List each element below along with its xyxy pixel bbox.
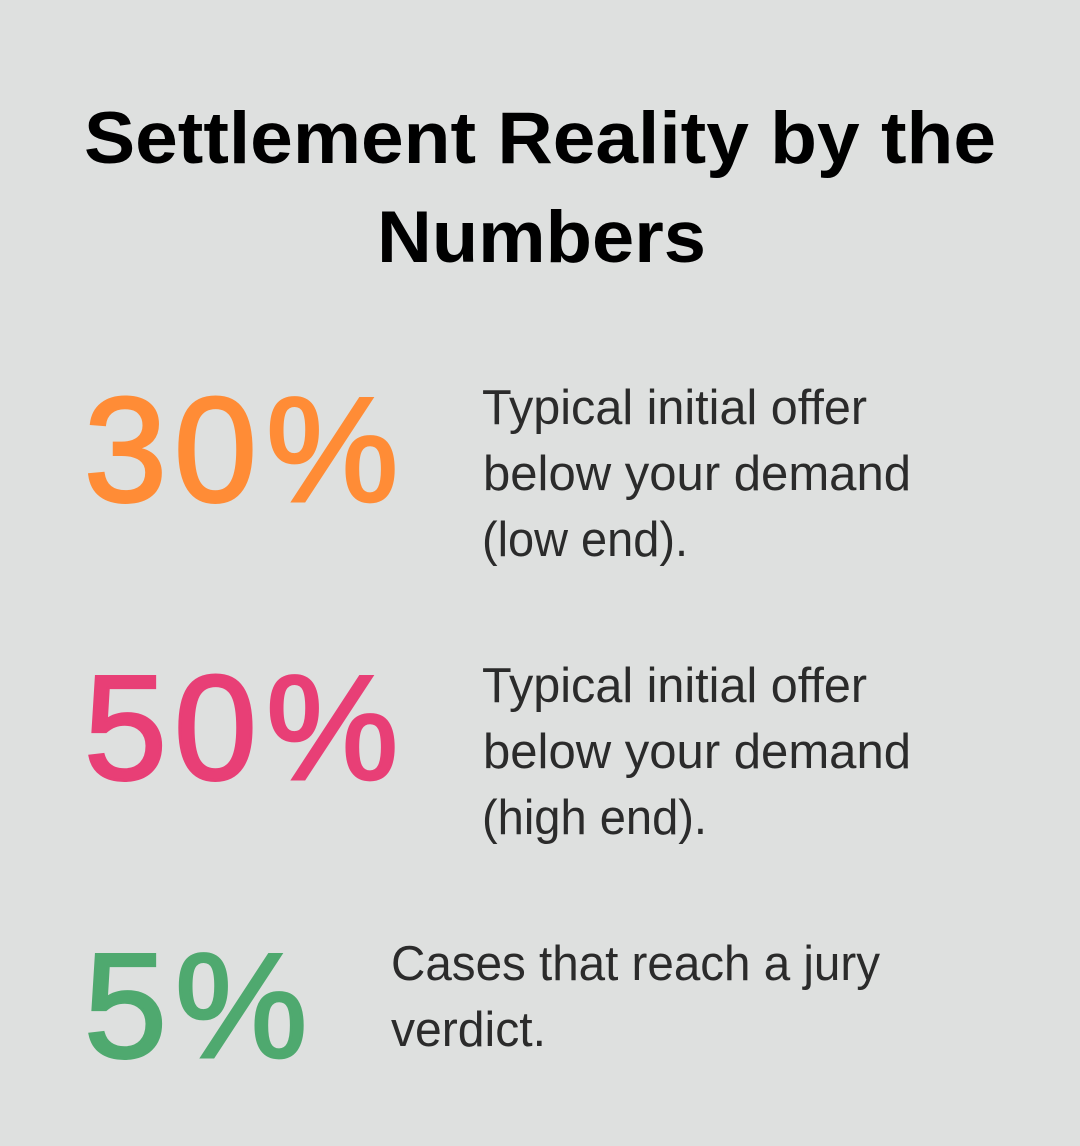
description: 30%: below your demand: [483, 447, 911, 501]
description: 5%: verdict.: [391, 1003, 546, 1057]
stat: 5%: [84, 922, 880, 1089]
title: Settlement Reality by the: [84, 98, 996, 179]
description: 30%: (low end).: [482, 513, 688, 567]
description: 50%: below your demand: [483, 725, 911, 779]
description: 30%: Typical initial offer: [482, 381, 867, 435]
description: 50%: [482, 659, 911, 845]
number: 5%: 5%: [84, 922, 308, 1089]
description: 30%: [482, 381, 911, 567]
number: 30%: 30%: [84, 366, 398, 533]
stat: 50%: [84, 644, 911, 845]
title: Numbers: [377, 197, 706, 278]
description: 50%: Typical initial offer: [482, 659, 867, 713]
stat: 30%: [84, 366, 911, 567]
number: 50%: 50%: [84, 644, 398, 811]
description: 50%: (high end).: [482, 791, 707, 845]
description: 5%: Cases that reach a jury: [391, 937, 880, 991]
description: 5%: [391, 937, 880, 1057]
title: [84, 98, 996, 278]
